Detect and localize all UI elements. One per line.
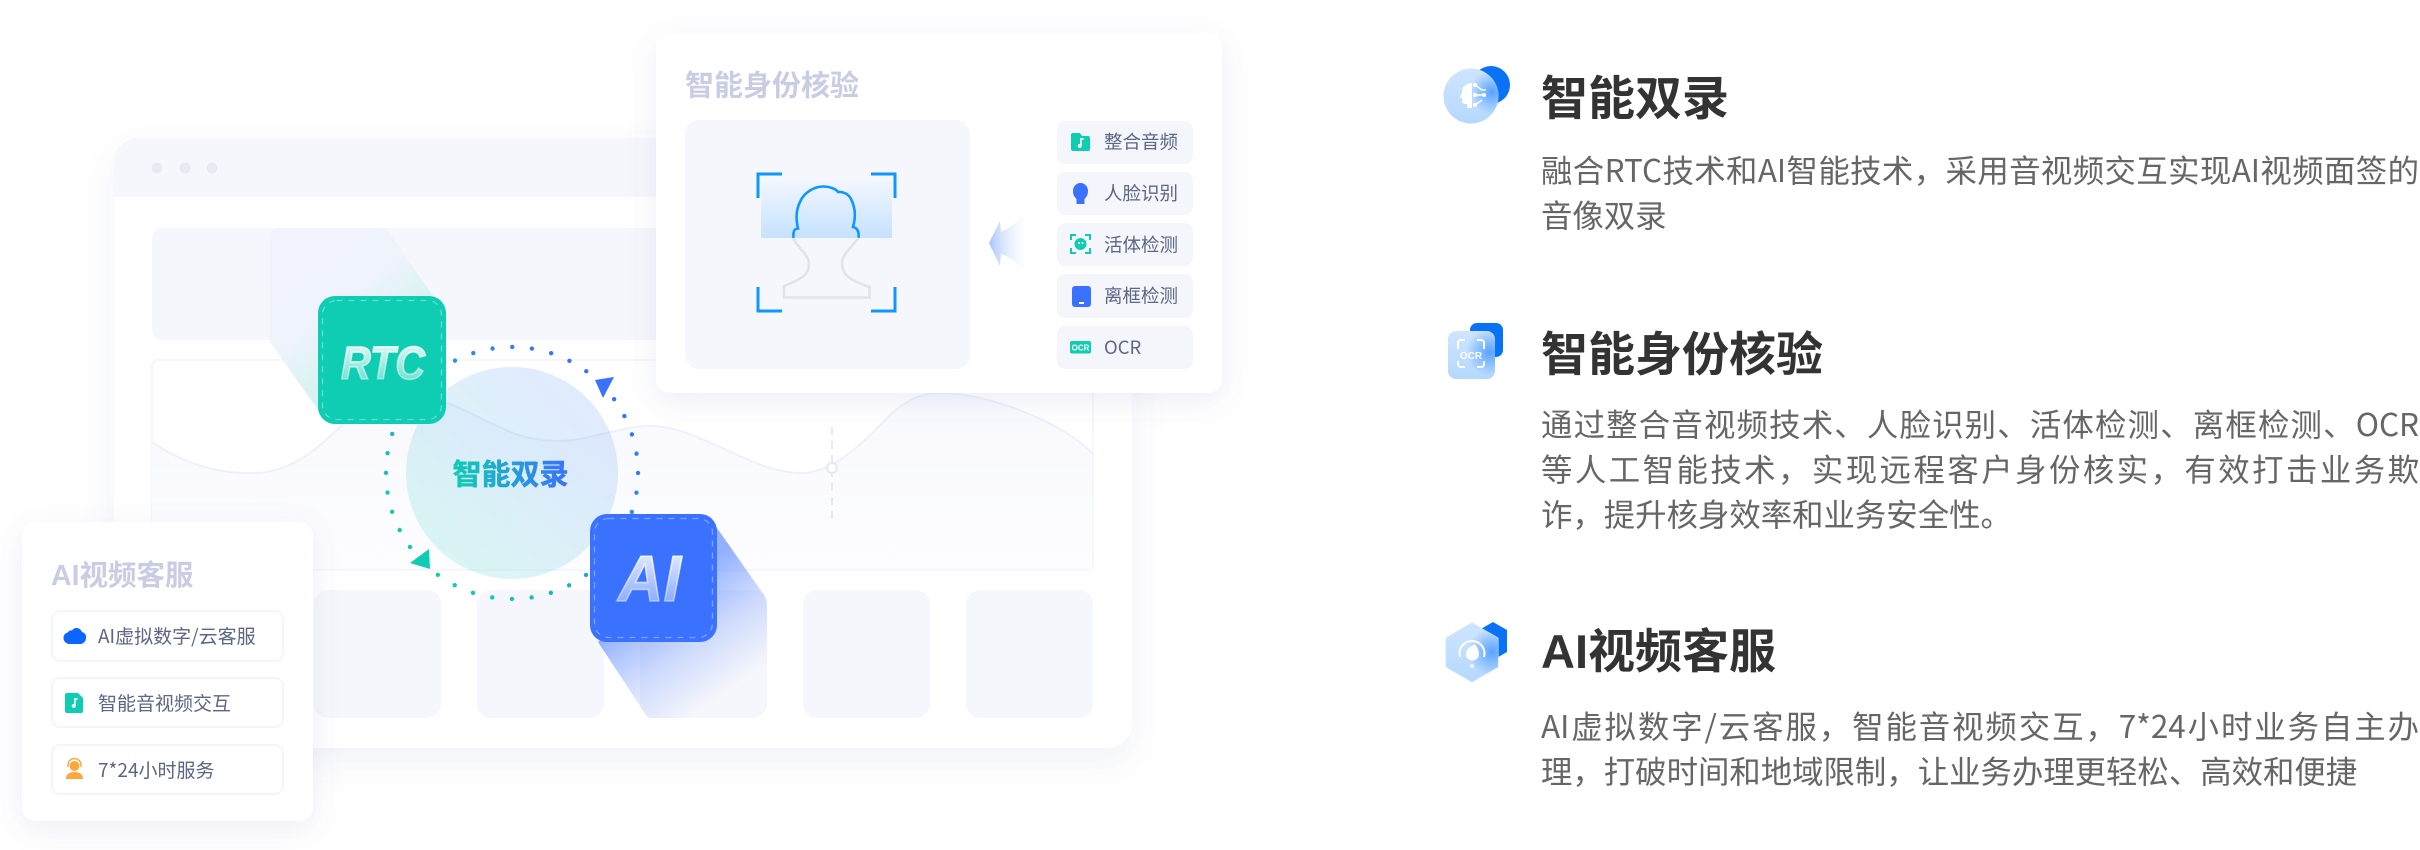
- badge: RTC: [318, 296, 446, 424]
- icon: identity verification: OCR: [1460, 351, 1483, 362]
- list: service features: 智能音视频交互: [98, 689, 231, 716]
- heading: AI video service: AI视频客服: [1541, 625, 1776, 678]
- icon: tablet: [1072, 286, 1091, 307]
- icon: AI video service: [1446, 622, 1507, 682]
- icon: OCR tag: OCR: [1072, 344, 1090, 352]
- text: identity verification description: 通过整合音视频技术、人脸识别、活体检测、离框检测、OCR: [1541, 401, 2419, 446]
- RTC light beam: [270, 228, 436, 420]
- badge: RTC: RTC: [341, 337, 426, 389]
- AI light beam: [598, 528, 767, 718]
- arrow: towards face panel: [989, 207, 1030, 277]
- icon: audio file: [65, 693, 83, 713]
- icon: identity verification: [1448, 323, 1503, 379]
- icon: head: [1073, 183, 1088, 204]
- text: AI video service description: 理，打破时间和地域限制，让业务办理更轻松、高效和便捷: [1541, 748, 2357, 793]
- list: verification features: OCR: [1104, 334, 1142, 360]
- chart: background wave area: [152, 360, 1093, 570]
- icon: smart recording: [1444, 66, 1510, 124]
- arrow: teal triangle: [410, 549, 430, 569]
- panel: identity verification card: [656, 33, 1222, 393]
- text: identity verification description: 等人工智能技术，实现远程客户身份核实，有效打击业务欺: [1541, 446, 2419, 491]
- list: service features: [52, 611, 283, 794]
- badge: AI: [590, 514, 717, 642]
- panel: main product window: [114, 138, 1132, 748]
- list: verification features: 活体检测: [1104, 232, 1178, 258]
- heading: identity verification: 智能身份核验: [1541, 316, 1823, 384]
- text: identity verification description: [1541, 401, 2419, 536]
- icon: OCR tag: [1070, 341, 1091, 354]
- list: service features: AI虚拟数字/云客服: [98, 622, 256, 649]
- heading: identity verification: 智能身份核验: [685, 62, 859, 104]
- icon: agent: [66, 759, 83, 779]
- centre circle: [406, 367, 618, 579]
- list: service features: 7*24小时服务: [98, 756, 215, 783]
- text: smart recording description: [1541, 147, 2419, 237]
- list: verification features: 人脸识别: [1104, 180, 1178, 206]
- arrow: blue triangle: [595, 377, 614, 398]
- panel: AI video service card: [22, 522, 313, 821]
- face scan panel: [685, 120, 970, 369]
- icon: live face scan: [1071, 235, 1090, 253]
- list: verification features: [1057, 121, 1193, 369]
- badge: AI: AI: [616, 542, 683, 615]
- dotted ring: [386, 347, 638, 599]
- bottom tiles: [314, 590, 1093, 718]
- text: smart recording description: 融合RTC技术和AI智能技术，采用音视频交互实现AI视频面签的: [1541, 147, 2419, 192]
- heading: smart recording: 智能双录: [1541, 60, 1729, 128]
- icon: cloud: [63, 628, 86, 644]
- text: smart recording description: 音像双录: [1541, 192, 1667, 237]
- text: AI video service description: AI虚拟数字/云客服，智能音视频交互，7*24小时业务自主办: [1541, 703, 2419, 748]
- list: verification features: 离框检测: [1104, 283, 1178, 309]
- list: verification features: 整合音频: [1104, 129, 1178, 155]
- text: identity verification description: 诈，提升核身效率和业务安全性。: [1541, 491, 2012, 536]
- label: centre title: 智能双录: [452, 452, 569, 494]
- heading: AI video service: AI视频客服: [51, 560, 194, 592]
- icon: folder note: [1071, 133, 1090, 151]
- text: AI video service description: [1541, 703, 2419, 793]
